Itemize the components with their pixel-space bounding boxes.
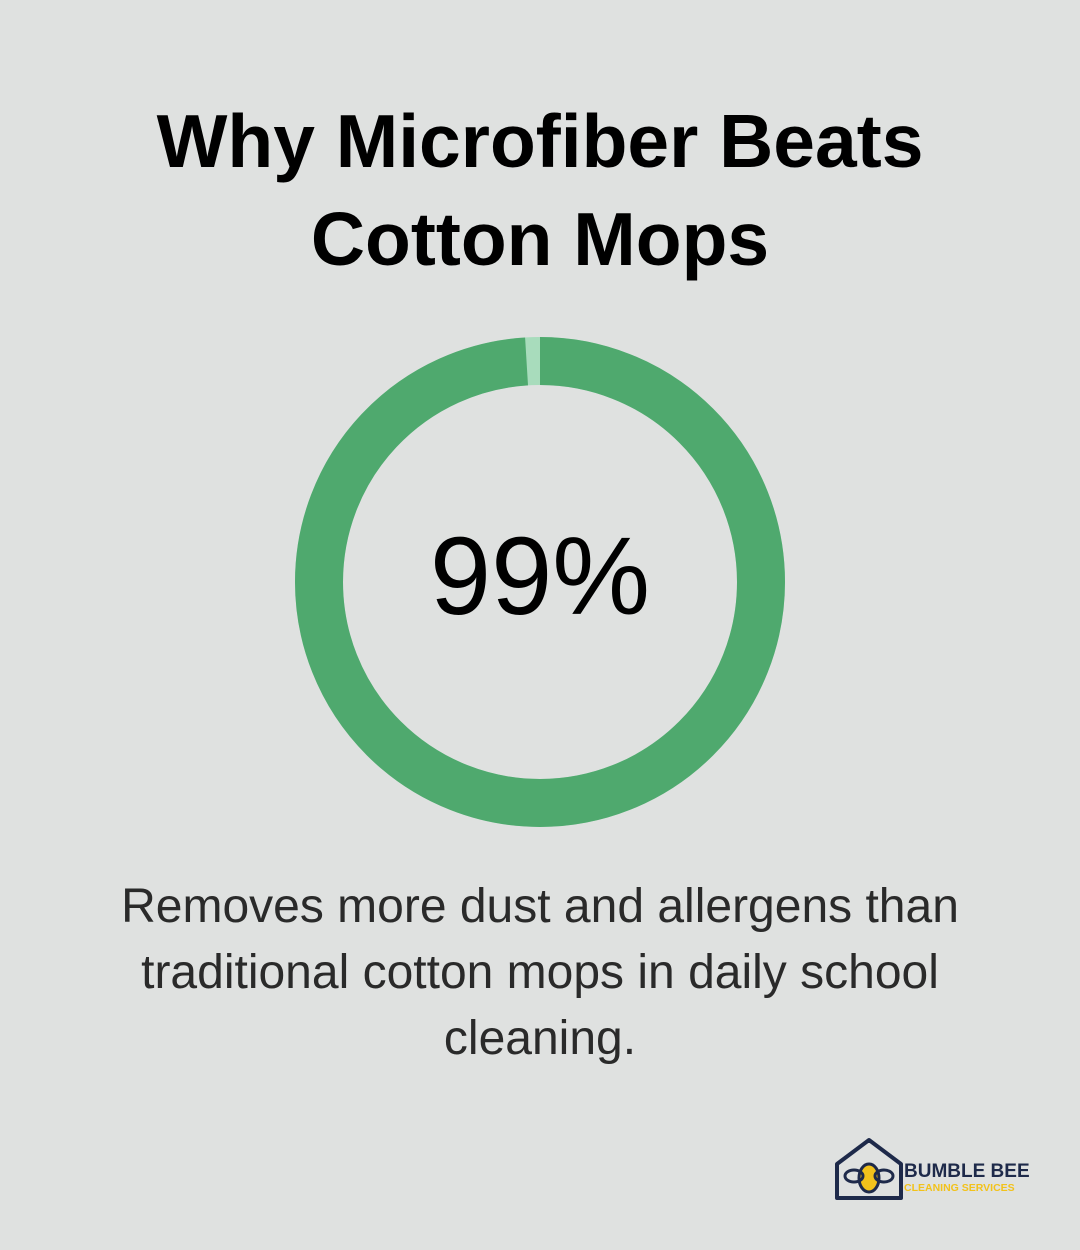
logo: Bumble Bee Cleaning Services: CLEANING SERVICES (904, 1182, 1015, 1194)
title (156, 99, 923, 281)
title: Why Microfiber Beats (157, 99, 923, 183)
logo: Bumble Bee Cleaning Services (835, 1138, 1030, 1200)
title: Cotton Mops (311, 197, 769, 281)
logo: Bumble Bee Cleaning Services: BUMBLE BEE (904, 1161, 1030, 1182)
description text: Removes more dust and allergens than traditional cotton mops in daily school cleaning. (121, 880, 959, 1065)
donut chart: 99%: 99% (430, 515, 650, 638)
